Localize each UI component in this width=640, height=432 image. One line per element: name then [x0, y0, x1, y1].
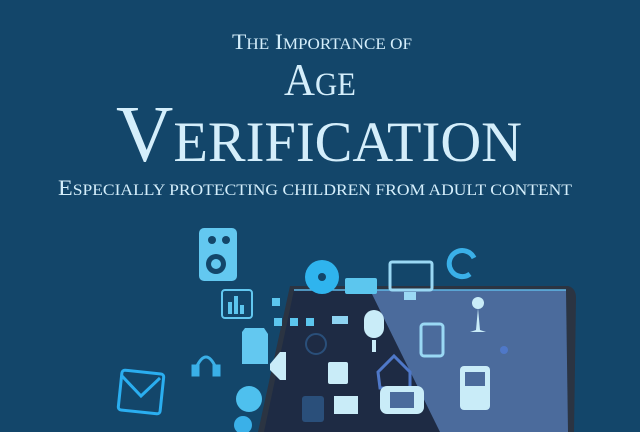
icon: wifi	[500, 346, 508, 354]
icon: gear	[234, 416, 252, 432]
icon: loudspeaker	[270, 352, 286, 380]
icon: mail	[118, 370, 164, 414]
heading line 3: VERIFICATION	[116, 91, 522, 179]
icon: mixer	[328, 362, 348, 384]
icon: clock	[306, 334, 326, 354]
icon: headphones	[193, 357, 219, 375]
icon: disc	[305, 260, 339, 294]
icon: keyboard	[345, 278, 377, 294]
subtitle: ESPECIALLY PROTECTING CHILDREN FROM ADULT CONTENT	[58, 175, 572, 200]
icon: refresh	[449, 251, 474, 277]
icon: monitor	[390, 262, 432, 300]
icon: joystick	[332, 316, 348, 324]
tablet	[258, 286, 576, 432]
icon: antenna	[470, 297, 486, 332]
icons	[118, 228, 508, 432]
icon: sd card	[242, 328, 268, 364]
icon: address book	[302, 396, 324, 422]
icon: microphone	[364, 310, 384, 352]
icon: speaker	[199, 228, 237, 281]
icon: house	[378, 356, 410, 388]
heading line 1: THE IMPORTANCE OF	[232, 29, 412, 54]
title	[58, 29, 572, 200]
icon: clapper	[334, 396, 358, 414]
icon: network	[272, 298, 314, 326]
icon: mobile phone	[460, 366, 490, 410]
icon: globe	[236, 386, 262, 412]
icon: game console	[380, 386, 424, 414]
icon: equalizer	[222, 290, 252, 318]
heading line 2: AGE	[284, 54, 356, 105]
icon: phone	[421, 324, 443, 356]
